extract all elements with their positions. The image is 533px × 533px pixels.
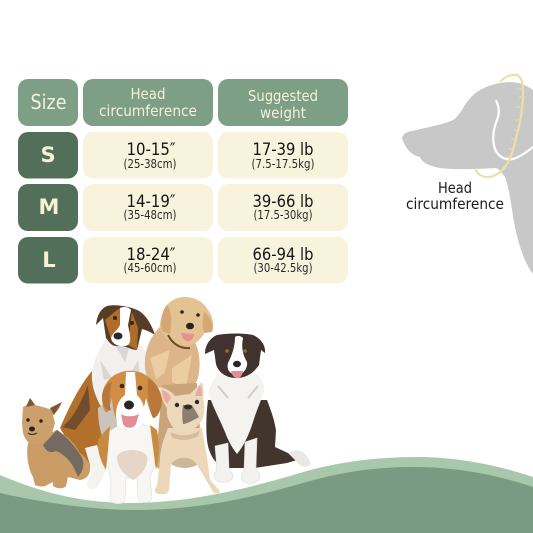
dog: border collie	[205, 334, 310, 483]
header: head circumference: Head	[130, 85, 166, 103]
row S	[18, 132, 348, 178]
row M: (35-48cm)	[124, 208, 176, 222]
dog: rough collie	[60, 305, 155, 489]
row L: (45-60cm)	[124, 261, 176, 275]
header: head circumference: circumference	[99, 102, 197, 120]
row L	[18, 237, 348, 284]
row M	[18, 184, 348, 231]
row L: 66-94 lb	[252, 245, 314, 265]
row M: M	[39, 195, 59, 219]
label: head circumference	[406, 179, 504, 213]
row M: 39-66 lb	[252, 192, 314, 212]
header: suggested weight: weight	[260, 104, 306, 122]
label: head circumference: circumference	[406, 195, 504, 213]
row M: 14-19″	[126, 192, 176, 212]
row L: (30-42.5kg)	[254, 261, 312, 275]
header: suggested weight	[218, 79, 348, 126]
row L: L	[42, 248, 56, 272]
header: size: Size	[30, 90, 66, 114]
row L: 18-24″	[126, 245, 176, 265]
ground waves	[0, 457, 533, 533]
row S: S	[40, 143, 56, 167]
icon: dog head silhouette with measuring ring	[402, 75, 533, 274]
size table	[18, 79, 348, 284]
dogs group	[22, 297, 310, 504]
row S: 10-15″	[126, 140, 176, 160]
dog: beagle	[98, 371, 162, 504]
label: head circumference: Head	[438, 179, 472, 197]
header: size	[18, 79, 78, 126]
row S: (7.5-17.5kg)	[252, 157, 314, 171]
header: head circumference	[83, 79, 213, 126]
dog: yorkshire terrier	[22, 398, 90, 488]
dog: goldendoodle	[145, 297, 213, 470]
dog: french bulldog	[155, 382, 220, 494]
row S: 17-39 lb	[252, 140, 314, 160]
row M: (17.5-30kg)	[254, 208, 312, 222]
row S: (25-38cm)	[124, 157, 176, 171]
header: suggested weight: Suggested	[248, 87, 318, 105]
